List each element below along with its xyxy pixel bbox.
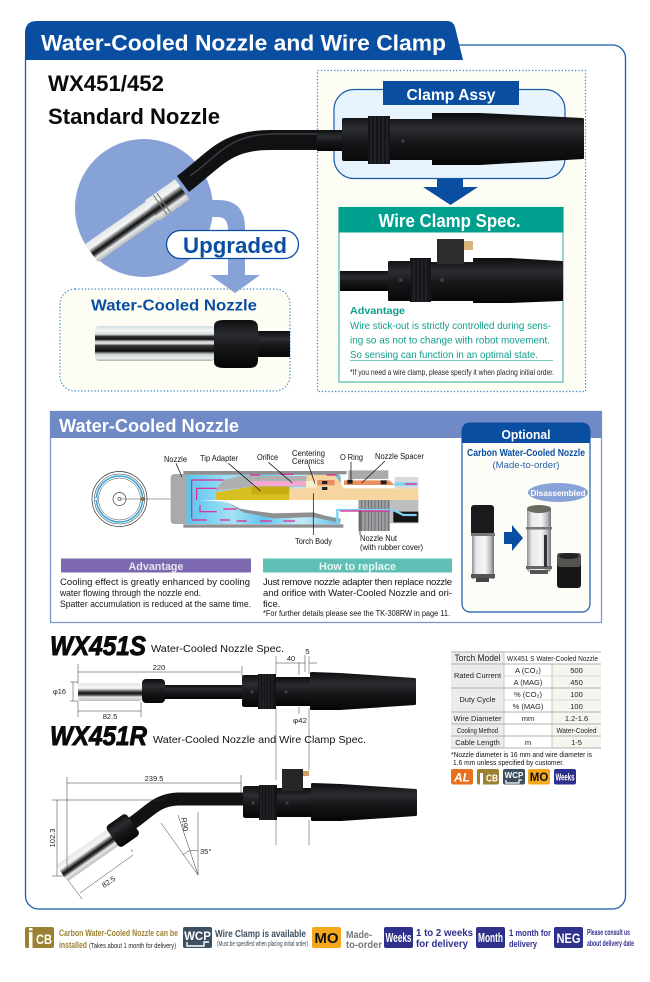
dimensions: WX451S: 5 — [305, 647, 310, 656]
spec table: Duty Cycle — [459, 695, 496, 704]
dimensions: WX451S: 82.5 — [103, 712, 117, 721]
disassembled badge — [528, 483, 588, 502]
icon: Weeks small: Weeks — [556, 772, 575, 784]
diagram part labels: Nozzle — [164, 455, 188, 464]
photo: water-cooled nozzle — [95, 320, 290, 368]
legend: WCP: WCP — [184, 931, 211, 943]
legend: MO — [312, 927, 382, 951]
spec table: Cooling Method — [457, 728, 498, 735]
advantage column — [59, 558, 251, 610]
spec table: % (MAG) — [513, 702, 544, 711]
advantage column: Spatter accumulation is reduced at the same time. — [60, 599, 251, 610]
advantage text: So sensing can function in an optimal state. — [350, 349, 538, 361]
upgraded badge: Upgraded — [183, 233, 287, 258]
leader lines — [176, 461, 385, 535]
heading: WX451/452 Standard Nozzle: WX451/452 — [48, 71, 164, 96]
spec table: A (CO₂) — [515, 666, 541, 675]
advantage column: water flowing through the nozzle end. — [59, 588, 201, 599]
icon: iCB small: CB — [486, 772, 498, 784]
diagram part labels: Ceramics — [292, 457, 324, 466]
legend: iCB: Carbon Water-Cooled Nozzle can be — [59, 928, 178, 938]
diagram part labels: O Ring — [340, 453, 363, 462]
legend: WCP: Wire Clamp is available — [215, 929, 306, 940]
details heading — [50, 411, 602, 438]
spec table: 450 — [570, 678, 583, 687]
spec table: A (MAG) — [514, 678, 543, 687]
WX451S heading: WX451S — [50, 631, 146, 661]
drawing: WX451S torch — [78, 672, 416, 710]
clamp assy heading: Clamp Assy — [406, 87, 496, 104]
diagram: nozzle cross-section — [171, 461, 418, 535]
diagram part labels — [164, 449, 424, 552]
clamp assy heading — [383, 81, 519, 105]
wire clamp footnote: *If you need a wire clamp, please specify it when placing initial order. — [350, 367, 554, 377]
photo: standard nozzle torch — [84, 134, 345, 263]
upgraded badge — [166, 230, 298, 258]
optional subtitle: (Made-to-order) — [492, 460, 560, 471]
dimensions: WX451R: 35° — [200, 847, 211, 856]
spec table: Rated Current — [454, 671, 502, 680]
how to replace column: How to replace — [319, 561, 396, 573]
heading: WX451/452 Standard Nozzle: Standard Nozzle — [48, 104, 220, 129]
panel: optional carbon nozzle — [462, 423, 590, 612]
diagram part labels: Nozzle Nut — [360, 534, 398, 543]
spec table: Water-Cooled — [556, 726, 596, 735]
table footnote: 1.6 mm unless specified by customer. — [453, 758, 564, 767]
WX451S heading: Water-Cooled Nozzle Spec. — [151, 643, 284, 655]
spec table: 100 — [570, 702, 583, 711]
dimensions: WX451R: R90 — [179, 817, 190, 832]
legend: NEG — [554, 927, 634, 948]
panel: water-cooled nozzle details — [50, 411, 602, 622]
advantage column: Advantage — [128, 561, 184, 573]
legend: Weeks: 1 to 2 weeks — [416, 928, 473, 939]
how to replace column: Just remove nozzle adapter then replace nozzle — [263, 577, 452, 588]
spec table: 100 — [570, 690, 583, 699]
spec table: % (CO₂) — [514, 690, 542, 699]
heading: WX451/452 Standard Nozzle — [48, 71, 220, 129]
panel: clamp assy — [317, 81, 584, 178]
advantage text: Wire stick-out is strictly controlled during sens- — [350, 320, 551, 332]
legend: Month — [476, 927, 551, 950]
legend: Month: Month — [478, 930, 503, 945]
details heading: Water-Cooled Nozzle — [59, 416, 239, 436]
spec table: WX451 S Water-Cooled Nozzle — [507, 654, 598, 663]
legend: WCP: (Must be specified when placing initial order) — [217, 941, 308, 948]
arrow: clamp to wire clamp spec — [423, 179, 478, 205]
dimensions: WX451S: φ42 — [293, 716, 307, 725]
legend: MO: to-order — [346, 939, 382, 951]
panel: wire clamp area — [317, 70, 586, 392]
how to replace column: fice. — [263, 599, 280, 610]
WX451R heading — [50, 721, 366, 751]
how to replace column: *For further details please see the TK-308RW in page 11. — [263, 609, 450, 618]
WX451R heading: Water-Cooled Nozzle and Wire Clamp Spec. — [153, 734, 366, 746]
legend: Weeks — [384, 927, 473, 950]
legend: Month: delivery — [509, 939, 538, 950]
advantage text: ing so as not to change with robot movement. — [350, 334, 550, 346]
icon: MO small: MO — [530, 772, 548, 784]
table footnote — [451, 750, 592, 767]
water-cooled nozzle heading: Water-Cooled Nozzle — [91, 298, 257, 314]
table footnote: *Nozzle diameter is 16 mm and wire diameter is — [451, 750, 592, 759]
diagram part labels: Orifice — [257, 453, 278, 462]
legend: WCP — [183, 927, 308, 948]
legend: NEG: NEG — [556, 931, 580, 946]
spec table: Cable Length — [455, 738, 500, 747]
photo: disassembled nozzle — [526, 505, 581, 588]
optional subtitle — [467, 447, 585, 471]
legend: Weeks: Weeks — [386, 930, 412, 945]
spec table: 500 — [570, 666, 583, 675]
dimensions: WX451S: φ16 — [53, 687, 66, 696]
drawing: WX451R torch — [54, 769, 417, 884]
spec table: 1.2-1.6 — [565, 714, 588, 723]
legend: MO: Made- — [346, 929, 372, 941]
legend — [25, 927, 634, 951]
photo: wire clamp handle — [340, 239, 563, 303]
dimensions: WX451S: 220 — [153, 663, 165, 672]
dimensions: WX451R — [48, 774, 241, 899]
spec table: mm — [522, 714, 534, 723]
spec table: Torch Model — [454, 653, 500, 663]
water flow arrows — [192, 474, 417, 521]
how to replace column: and orifice with Water-Cooled Nozzle and ori- — [263, 588, 452, 599]
diagram part labels: Torch Body — [295, 537, 332, 546]
upgrade arrow — [205, 200, 260, 293]
spec table: m — [525, 738, 531, 747]
wire clamp spec heading — [338, 207, 564, 232]
spec table — [451, 652, 601, 748]
how to replace column — [263, 558, 452, 618]
panel: wire clamp spec — [338, 207, 564, 382]
diagram part labels: Nozzle Spacer — [375, 452, 424, 461]
advantage column: Cooling effect is greatly enhanced by cooling — [60, 577, 250, 588]
title tab: Water-Cooled Nozzle and Wire Clamp — [41, 30, 446, 56]
photo: assembled carbon nozzle — [471, 505, 495, 582]
diagram part labels: Tip Adapter — [200, 454, 238, 463]
blue circle backdrop — [75, 139, 213, 277]
WX451S heading — [50, 631, 284, 661]
diagram part labels: (with rubber cover) — [360, 543, 423, 552]
spec table: Wire Diameter — [454, 714, 502, 723]
legend: Month: 1 month for — [509, 928, 551, 939]
WX451R heading: WX451R — [50, 721, 147, 751]
optional subtitle: Carbon Water-Cooled Nozzle — [467, 447, 585, 459]
icon: WCP small: WCP — [505, 771, 524, 780]
diagram: end view of nozzle — [92, 472, 171, 526]
dimensions: WX451S: 40 — [287, 654, 295, 663]
photo: clamp assembly handle — [317, 113, 584, 165]
dimensions: WX451R: 102.3 — [48, 829, 57, 847]
panel: water-cooled nozzle — [60, 289, 290, 391]
dimensions: WX451S — [53, 647, 317, 725]
arrow: disassembly — [504, 525, 523, 551]
legend: iCB — [25, 927, 178, 951]
optional heading: Optional — [502, 428, 550, 442]
advantage text: Advantage — [350, 305, 405, 317]
title tab — [25, 21, 463, 60]
diagram part labels: Centering — [292, 449, 325, 458]
advantage text — [350, 305, 551, 361]
optional heading — [462, 423, 590, 443]
wire clamp spec heading: Wire Clamp Spec. — [378, 211, 520, 231]
dimension guide lines — [276, 656, 309, 845]
legend: MO: MO — [314, 930, 339, 947]
dimensions: WX451R: 82.5 — [100, 874, 117, 890]
icon: AL: AL — [453, 770, 470, 784]
legend: Weeks: for delivery — [416, 939, 468, 950]
icon row — [451, 769, 576, 785]
legend: iCB: CB — [36, 931, 52, 947]
legend: iCB: installed — [59, 940, 87, 951]
legend: iCB: (Takes about 1 month for delivery) — [89, 941, 176, 950]
spec table: 1-5 — [571, 738, 582, 747]
dimensions: WX451R: 239.5 — [145, 774, 163, 783]
disassembled badge: Disassembled — [530, 488, 586, 498]
